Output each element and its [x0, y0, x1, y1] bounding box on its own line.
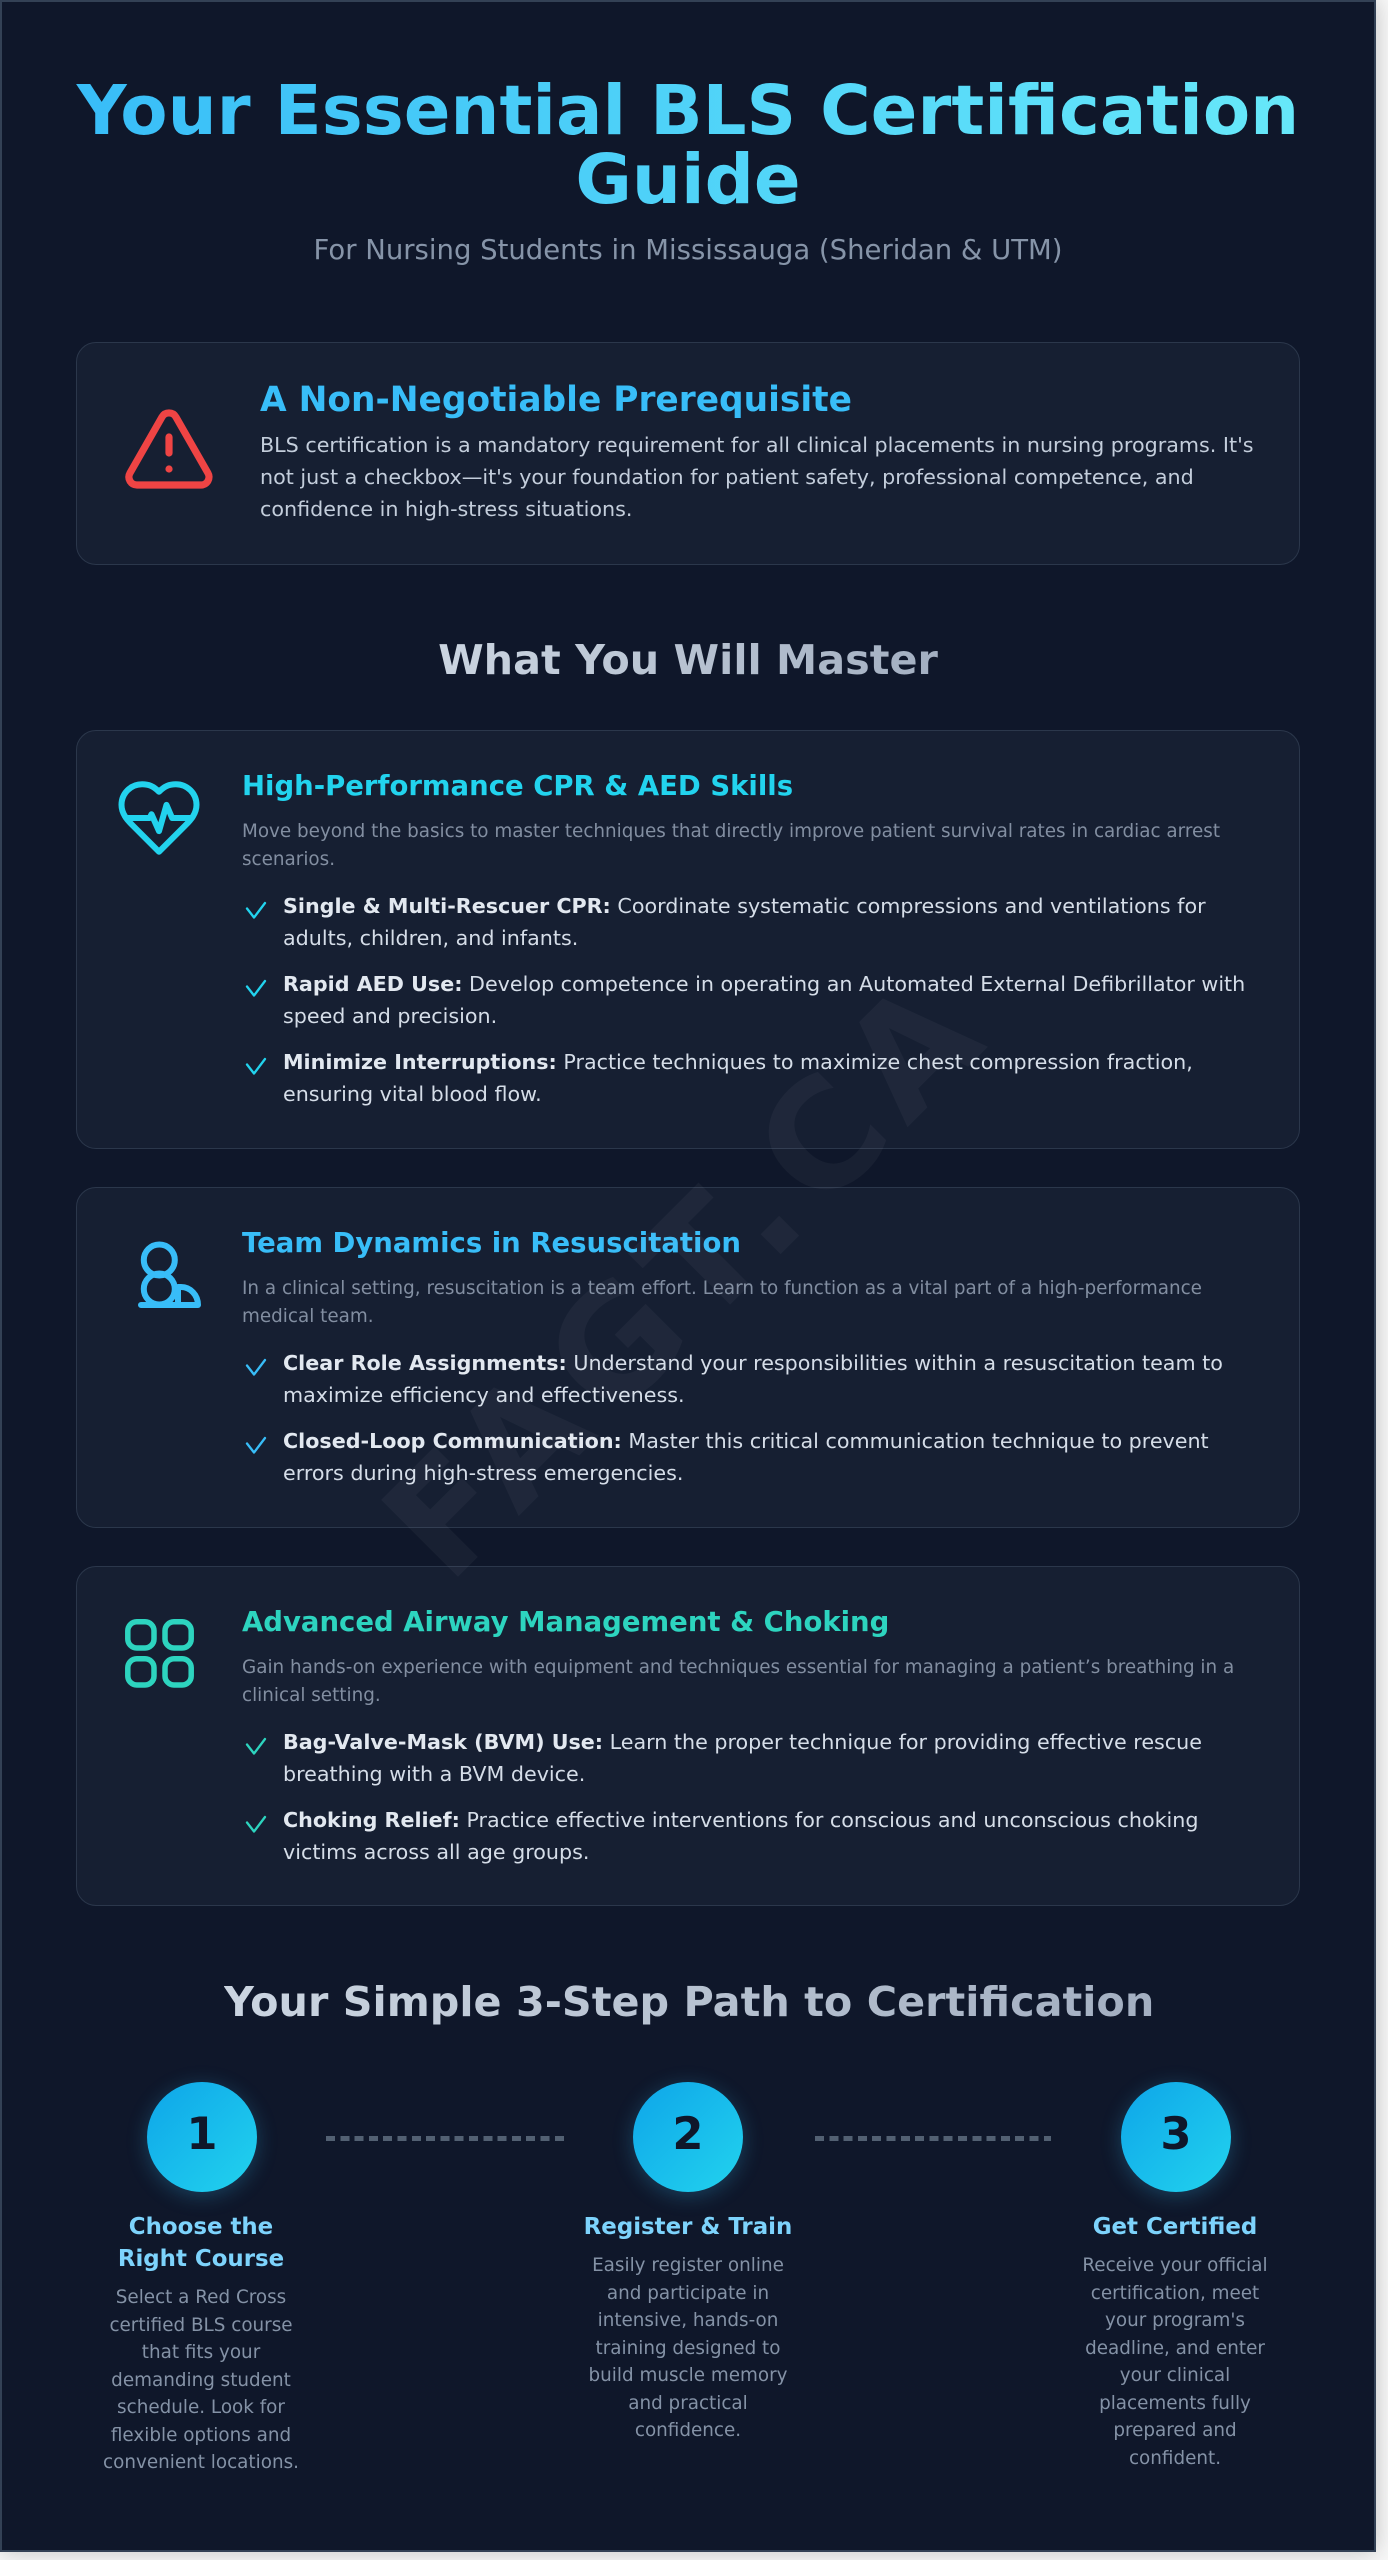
step 2 text: confidence.: [635, 2420, 741, 2441]
step 2 text: and practical: [628, 2392, 748, 2414]
icon: heart pulse: [118, 781, 200, 855]
step circle 2: [633, 2082, 743, 2192]
list item: choking: Choking Relief: Practice effective interventions for conscious and unconscious choking: [283, 1808, 1198, 1832]
icon: airway grid: [125, 1619, 194, 1688]
heading: 3-step path: Your Simple 3-Step Path to Certification: [224, 1978, 1154, 2026]
subtitle: For Nursing Students in Mississauga (Sheridan & UTM): [314, 234, 1062, 266]
connector 1: [326, 2136, 564, 2141]
icon: check: [246, 902, 266, 919]
step 3 text: deadline, and enter: [1085, 2338, 1265, 2358]
list item: roles: Clear Role Assignments: Understand your responsibilities within a resuscitation team to: [283, 1351, 1223, 1375]
step 1 text: that fits your: [142, 2342, 260, 2363]
list item: BVM: [283, 1730, 1202, 1786]
list item: communication: errors during high-stress emergencies.: [283, 1461, 683, 1485]
connector 2: [815, 2136, 1051, 2141]
step 3 text: certification, meet: [1091, 2282, 1259, 2304]
heading: what you will master: What You Will Master: [438, 636, 938, 684]
list item: BVM: breathing with a BVM device.: [283, 1762, 585, 1786]
text: CPR description: scenarios.: [242, 849, 335, 870]
step 1 text: convenient locations.: [103, 2452, 299, 2473]
step 3 text: your clinical: [1120, 2365, 1230, 2386]
list item: CPR: adults, children, and infants.: [283, 926, 578, 950]
step 1 text: schedule. Look for: [117, 2397, 285, 2418]
text: team description: [242, 1278, 1202, 1327]
text: prerequisite body: [260, 433, 1254, 521]
list item: CPR: [283, 894, 1206, 950]
step 1 title: Choose the: [129, 2214, 273, 2240]
title: Your Essential BLS Certification: [77, 70, 1299, 150]
step 1 text: [103, 2287, 299, 2473]
step 1 text: flexible options and: [111, 2424, 291, 2446]
step 3 text: [1082, 2255, 1268, 2468]
step 1 text: certified BLS course: [109, 2314, 293, 2336]
step 2 text: [589, 2255, 787, 2441]
panel: airway: [76, 1566, 1300, 1906]
heading: prerequisite: A Non-Negotiable Prerequisite: [260, 380, 852, 420]
title: Guide: [575, 140, 801, 220]
step 1 title: Right Course: [118, 2246, 284, 2272]
step circle 3: [1121, 2082, 1231, 2192]
list item: AED: Rapid AED Use: Develop competence in operating an Automated External Defibrillator with: [283, 972, 1245, 996]
title: [68, 76, 1308, 216]
heading: CPR and AED: High-Performance CPR & AED Skills: [242, 770, 793, 802]
step circle 3: 3: [1160, 2107, 1192, 2160]
watermark: FAGT.CA: [351, 939, 1024, 1612]
icon: check: [246, 1436, 266, 1454]
icon: warning triangle: [125, 409, 213, 489]
list item: AED: [283, 972, 1245, 1028]
icon: team: [138, 1242, 201, 1308]
text: prerequisite body: not just a checkbox—it's your foundation for patient safety, professional competence, and: [260, 465, 1194, 489]
list item: communication: Closed-Loop Communication: Master this critical communication technique to prevent: [283, 1429, 1209, 1453]
list item: CPR: Single & Multi-Rescuer CPR: Coordinate systematic compressions and ventilations for: [283, 894, 1206, 918]
list item: interruptions: Minimize Interruptions: Practice techniques to maximize chest compression fraction,: [283, 1050, 1193, 1074]
list item: BVM: Bag-Valve-Mask (BVM) Use: Learn the proper technique for providing effective rescue: [283, 1730, 1202, 1754]
step 2 text: build muscle memory: [589, 2365, 787, 2386]
text: airway description: Gain hands-on experience with equipment and techniques essential for managing a patient’s breathing in a: [242, 1657, 1234, 1678]
list item: choking: victims across all age groups.: [283, 1840, 589, 1864]
panel: CPR and AED: [76, 730, 1300, 1149]
icon: check: [246, 1358, 266, 1376]
text: prerequisite body: confidence in high-stress situations.: [260, 497, 632, 521]
heading: team dynamics: Team Dynamics in Resuscitation: [242, 1227, 741, 1259]
icon: check: [246, 1058, 266, 1075]
text: prerequisite body: BLS certification is a mandatory requirement for all clinical placements in nursing programs. It's: [260, 433, 1254, 457]
text: airway description: clinical setting.: [242, 1685, 381, 1706]
list item: roles: maximize efficiency and effectiveness.: [283, 1383, 685, 1407]
icon: check: [246, 1738, 266, 1755]
step 3 text: Receive your official: [1082, 2255, 1268, 2276]
panel: prerequisite: [76, 342, 1300, 565]
step 1 text: Select a Red Cross: [116, 2287, 286, 2308]
text: CPR description: Move beyond the basics to master techniques that directly improve patient survival rates in cardiac arrest: [242, 821, 1220, 842]
step 2 title: Register & Train: [584, 2214, 792, 2240]
text: airway description: [242, 1657, 1234, 1706]
step circle 1: 1: [186, 2107, 218, 2160]
panel: team dynamics: [76, 1187, 1300, 1528]
step 2 text: Easily register online: [592, 2255, 784, 2276]
text: CPR description: [242, 821, 1220, 870]
step 1 text: demanding student: [111, 2370, 291, 2390]
step circle 1: [147, 2082, 257, 2192]
heading: airway: Advanced Airway Management & Choking: [242, 1606, 889, 1638]
text: team description: In a clinical setting, resuscitation is a team effort. Learn to function as a vital part of a high-performance: [242, 1278, 1202, 1299]
step 3 text: prepared and: [1113, 2420, 1237, 2441]
list item: AED: speed and precision.: [283, 1004, 497, 1028]
step 2 text: intensive, hands-on: [598, 2310, 778, 2331]
step 2 text: and participate in: [607, 2282, 769, 2304]
icon: check: [246, 980, 266, 997]
step circle 2: 2: [672, 2107, 704, 2160]
step 3 text: placements fully: [1099, 2392, 1251, 2414]
list item: interruptions: [283, 1050, 1193, 1106]
step 1 title: [118, 2214, 284, 2272]
list item: communication: [283, 1429, 1209, 1485]
list item: interruptions: ensuring vital blood flow.: [283, 1082, 542, 1106]
text: team description: medical team.: [242, 1306, 374, 1327]
step 3 text: confident.: [1129, 2448, 1221, 2468]
step 3 text: your program's: [1105, 2310, 1245, 2331]
icon: check: [246, 1816, 266, 1833]
list item: roles: [283, 1351, 1223, 1407]
step 3 title: Get Certified: [1093, 2214, 1257, 2240]
step 2 text: training designed to: [596, 2338, 780, 2358]
list item: choking: [283, 1808, 1198, 1864]
